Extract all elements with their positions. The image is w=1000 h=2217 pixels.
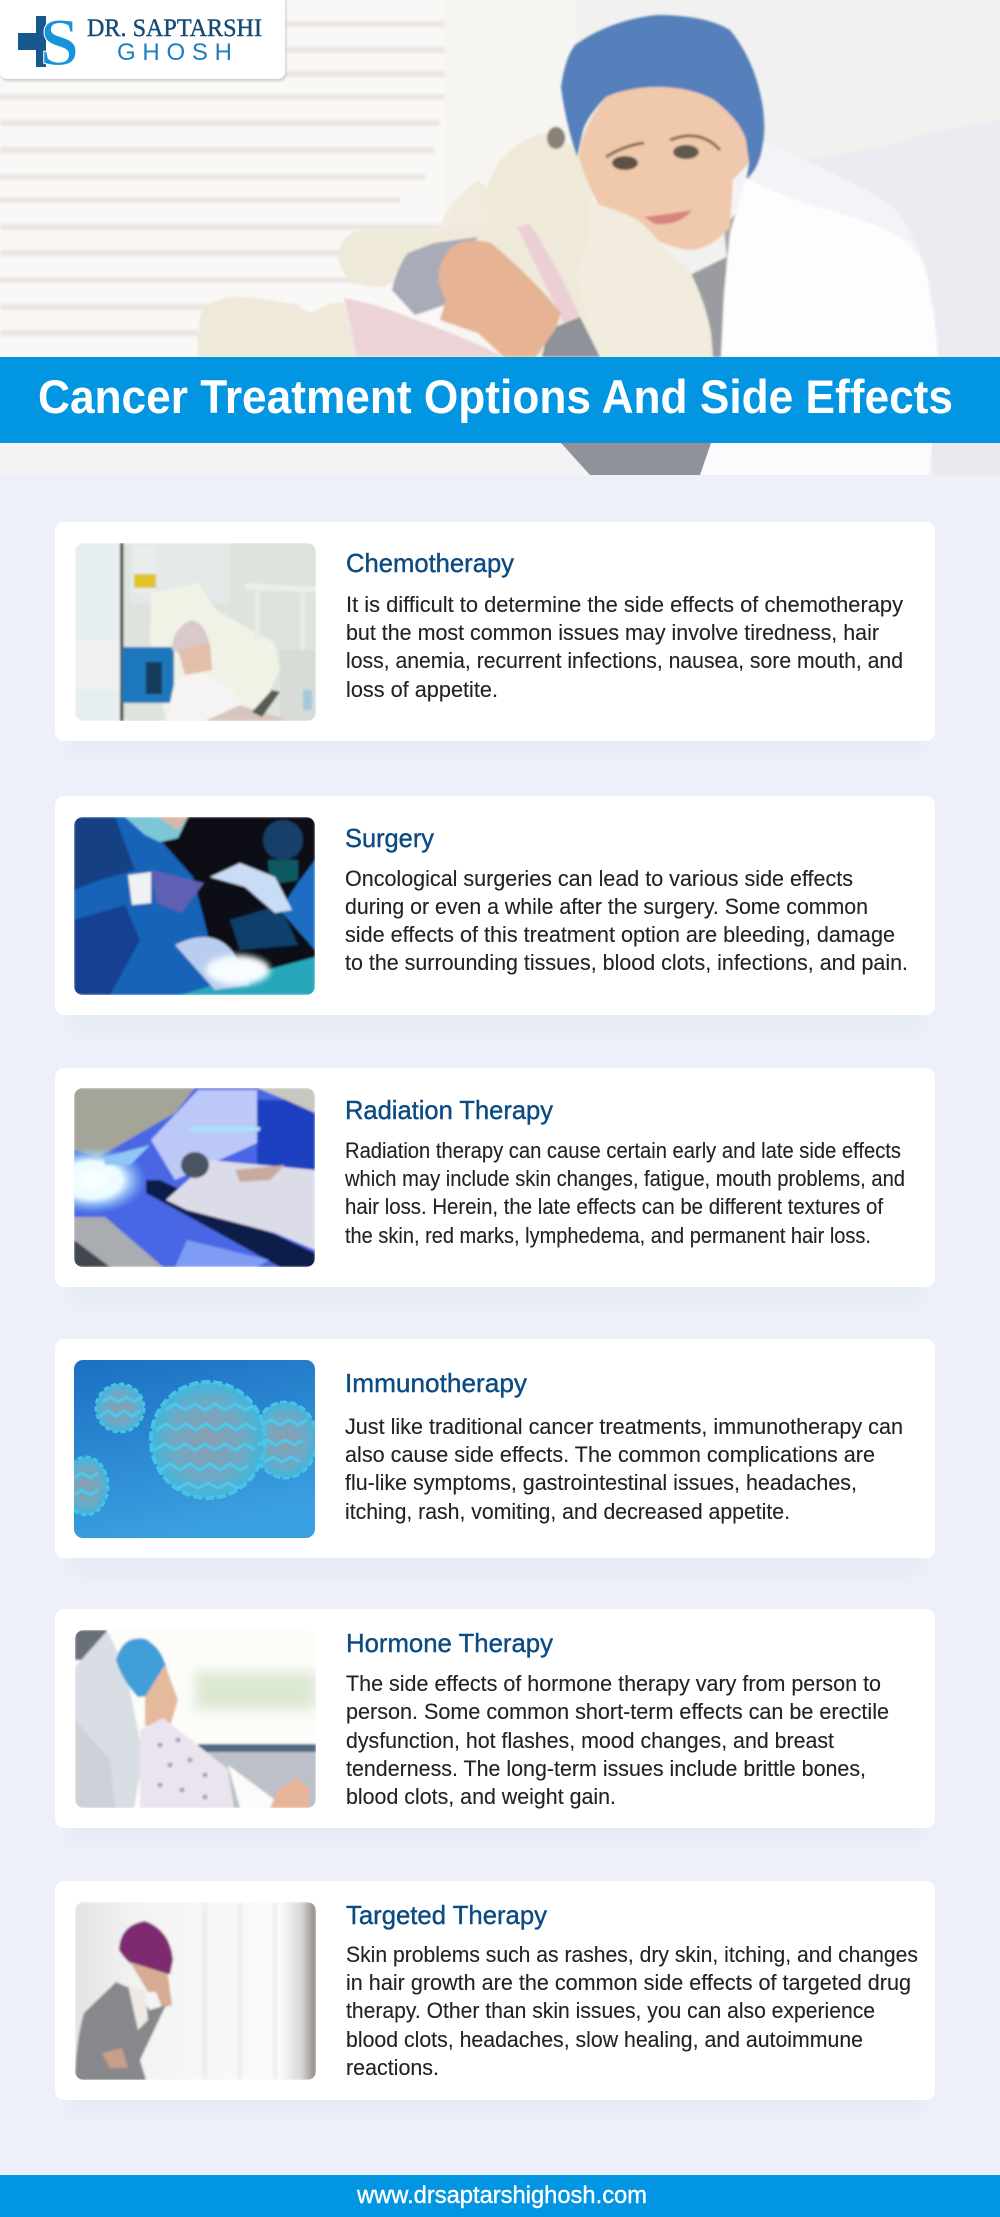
description: targeted therapy: blood clots, headaches, slow healing, and autoimmune xyxy=(346,2027,863,2052)
description: radiation therapy: the skin, red marks, lymphedema, and permanent hair loss. xyxy=(345,1223,871,1248)
description: immunotherapy xyxy=(345,1414,903,1524)
logo panel xyxy=(0,0,286,81)
website url: www.drsaptarshighosh.com xyxy=(356,2182,647,2209)
heading: hormone therapy: Hormone Therapy xyxy=(346,1628,553,1658)
description: hormone therapy: tenderness. The long-term issues include brittle bones, xyxy=(346,1756,866,1781)
description: radiation therapy: which may include skin changes, fatigue, mouth problems, and xyxy=(344,1166,905,1191)
panel: immunotherapy xyxy=(55,1339,935,1574)
description: targeted therapy: reactions. xyxy=(346,2055,439,2080)
hero photo: child with plush toy in bed xyxy=(0,0,1000,475)
description: hormone therapy: The side effects of hormone therapy vary from person to xyxy=(346,1671,881,1696)
description: immunotherapy: Just like traditional cancer treatments, immunotherapy can xyxy=(345,1414,903,1439)
photo: patient under radiation machine xyxy=(74,1088,315,1267)
description: chemotherapy: loss, anemia, recurrent infections, nausea, sore mouth, and xyxy=(346,648,903,673)
title banner xyxy=(0,357,1000,443)
description: immunotherapy: also cause side effects. The common complications are xyxy=(345,1442,875,1467)
description: targeted therapy: therapy. Other than skin issues, you can also experience xyxy=(346,1998,875,2023)
description: chemotherapy: It is difficult to determine the side effects of chemotherapy xyxy=(346,592,903,617)
description: hormone therapy xyxy=(346,1671,889,1809)
description: chemotherapy: loss of appetite. xyxy=(346,677,498,702)
logo icon: cross and S xyxy=(18,4,79,80)
photo: surgeons operating xyxy=(74,817,315,995)
footer bar xyxy=(0,2175,1000,2217)
description: immunotherapy: itching, rash, vomiting, and decreased appetite. xyxy=(345,1499,790,1524)
description: radiation therapy: Radiation therapy can cause certain early and late side effects xyxy=(345,1138,901,1163)
photo: patient in hospital bed by window xyxy=(75,1630,316,1808)
heading: immunotherapy: Immunotherapy xyxy=(345,1368,527,1398)
logo surname: GHOSH xyxy=(117,39,232,66)
panel: surgery xyxy=(55,796,935,1031)
description: chemotherapy xyxy=(346,592,903,702)
logo name: DR. SAPTARSHI xyxy=(87,15,262,42)
panel: radiation therapy xyxy=(37,1068,935,1303)
description: hormone therapy: blood clots, and weight gain. xyxy=(346,1784,616,1809)
panel: chemotherapy xyxy=(55,522,935,757)
description: hormone therapy: dysfunction, hot flashes, mood changes, and breast xyxy=(346,1728,834,1753)
main title: Cancer Treatment Options And Side Effects xyxy=(38,370,953,423)
panel: targeted therapy xyxy=(55,1881,935,2116)
description: targeted therapy: in hair growth are the common side effects of targeted drug xyxy=(346,1970,911,1995)
photo: patient with head scarf by curtains xyxy=(75,1902,316,2080)
panel: hormone therapy xyxy=(55,1609,935,1844)
heading: radiation therapy: Radiation Therapy xyxy=(345,1095,553,1125)
heading: surgery: Surgery xyxy=(345,823,434,853)
heading: chemotherapy: Chemotherapy xyxy=(346,548,514,578)
logo icon: cross and S: S xyxy=(40,4,79,80)
description: surgery: side effects of this treatment option are bleeding, damage xyxy=(345,922,895,947)
description: surgery: to the surrounding tissues, blood clots, infections, and pain. xyxy=(345,950,908,975)
photo: patient receiving chemotherapy xyxy=(75,543,316,721)
description: chemotherapy: but the most common issues may involve tiredness, hair xyxy=(346,620,879,645)
description: hormone therapy: person. Some common short-term effects can be erectile xyxy=(346,1699,889,1724)
description: radiation therapy: hair loss. Herein, the late effects can be different textures of xyxy=(345,1194,884,1219)
heading: targeted therapy: Targeted Therapy xyxy=(346,1900,547,1930)
description: surgery xyxy=(345,866,908,975)
description: radiation therapy xyxy=(344,1138,905,1248)
description: targeted therapy xyxy=(346,1942,918,2080)
description: targeted therapy: Skin problems such as rashes, dry skin, itching, and changes xyxy=(346,1942,918,1967)
description: surgery: during or even a while after the surgery. Some common xyxy=(345,894,868,919)
description: immunotherapy: flu-like symptoms, gastrointestinal issues, headaches, xyxy=(345,1470,857,1495)
description: surgery: Oncological surgeries can lead to various side effects xyxy=(345,866,853,891)
photo: immune cells xyxy=(64,1360,317,1538)
